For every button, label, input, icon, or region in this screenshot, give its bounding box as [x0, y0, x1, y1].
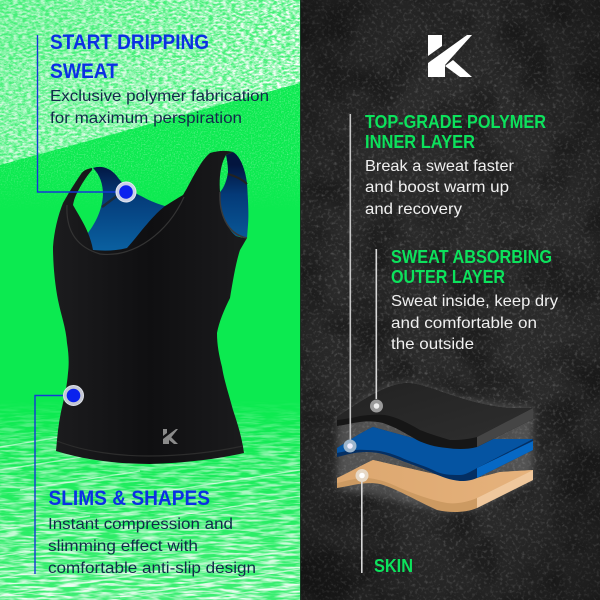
- left strap seam: [102, 195, 118, 207]
- description: and boost warm up: [365, 179, 509, 196]
- heading: SWEAT: [50, 60, 118, 83]
- description: and comfortable on: [391, 315, 537, 332]
- description: Instant compression and: [48, 516, 233, 533]
- right side blue lining: [220, 152, 248, 238]
- label: skin: SKIN: [374, 555, 413, 576]
- panel: green background: [0, 0, 300, 600]
- description: and recovery: [365, 201, 462, 218]
- description: comfortable anti-slip design: [48, 560, 256, 577]
- marker: inner layer: [344, 440, 356, 452]
- description: Sweat inside, keep dry: [391, 293, 558, 310]
- connector line: [38, 35, 118, 192]
- description: Exclusive polymer fabrication: [50, 88, 269, 105]
- blue layer: [337, 427, 533, 481]
- fabric layers diagram: [337, 383, 533, 512]
- heading: START DRIPPING: [50, 31, 209, 54]
- callout: top-grade polymer inner layer: [365, 111, 546, 218]
- marker dot: [116, 182, 136, 202]
- marker dot: [64, 386, 84, 406]
- inner blue lining: [88, 167, 168, 252]
- heading: SWEAT ABSORBING: [391, 246, 552, 267]
- marker: outer layer: [370, 400, 383, 412]
- glow behind layers: [337, 383, 533, 512]
- tank body: [53, 151, 247, 464]
- heading: OUTER LAYER: [391, 266, 505, 287]
- description: for maximum perspiration: [50, 110, 242, 127]
- heading: TOP-GRADE POLYMER: [365, 111, 546, 132]
- hem: [57, 441, 243, 456]
- description: the outside: [391, 336, 474, 353]
- panel: dark textured background: [300, 0, 600, 600]
- neckline seam: [67, 197, 184, 254]
- connector line: [35, 396, 66, 574]
- small K logo on tank: [163, 429, 178, 444]
- callout: sweat absorbing outer layer: [391, 246, 558, 353]
- compression tank top illustration: [53, 151, 248, 464]
- heading: INNER LAYER: [365, 131, 475, 152]
- description: slimming effect with: [48, 538, 198, 555]
- description: Break a sweat faster: [365, 158, 515, 175]
- skin layer: [337, 460, 533, 512]
- right armhole seam: [220, 192, 247, 238]
- marker: skin: [356, 469, 368, 482]
- black outer layer: [337, 383, 533, 449]
- right strap seam: [228, 174, 247, 184]
- heading: SLIMS & SHAPES: [48, 487, 210, 510]
- connector lines and markers for layers: [344, 114, 383, 573]
- callout: slims and shapes: [35, 386, 256, 577]
- callout: start dripping sweat: [38, 31, 269, 202]
- icon: K brand logo: [428, 35, 472, 77]
